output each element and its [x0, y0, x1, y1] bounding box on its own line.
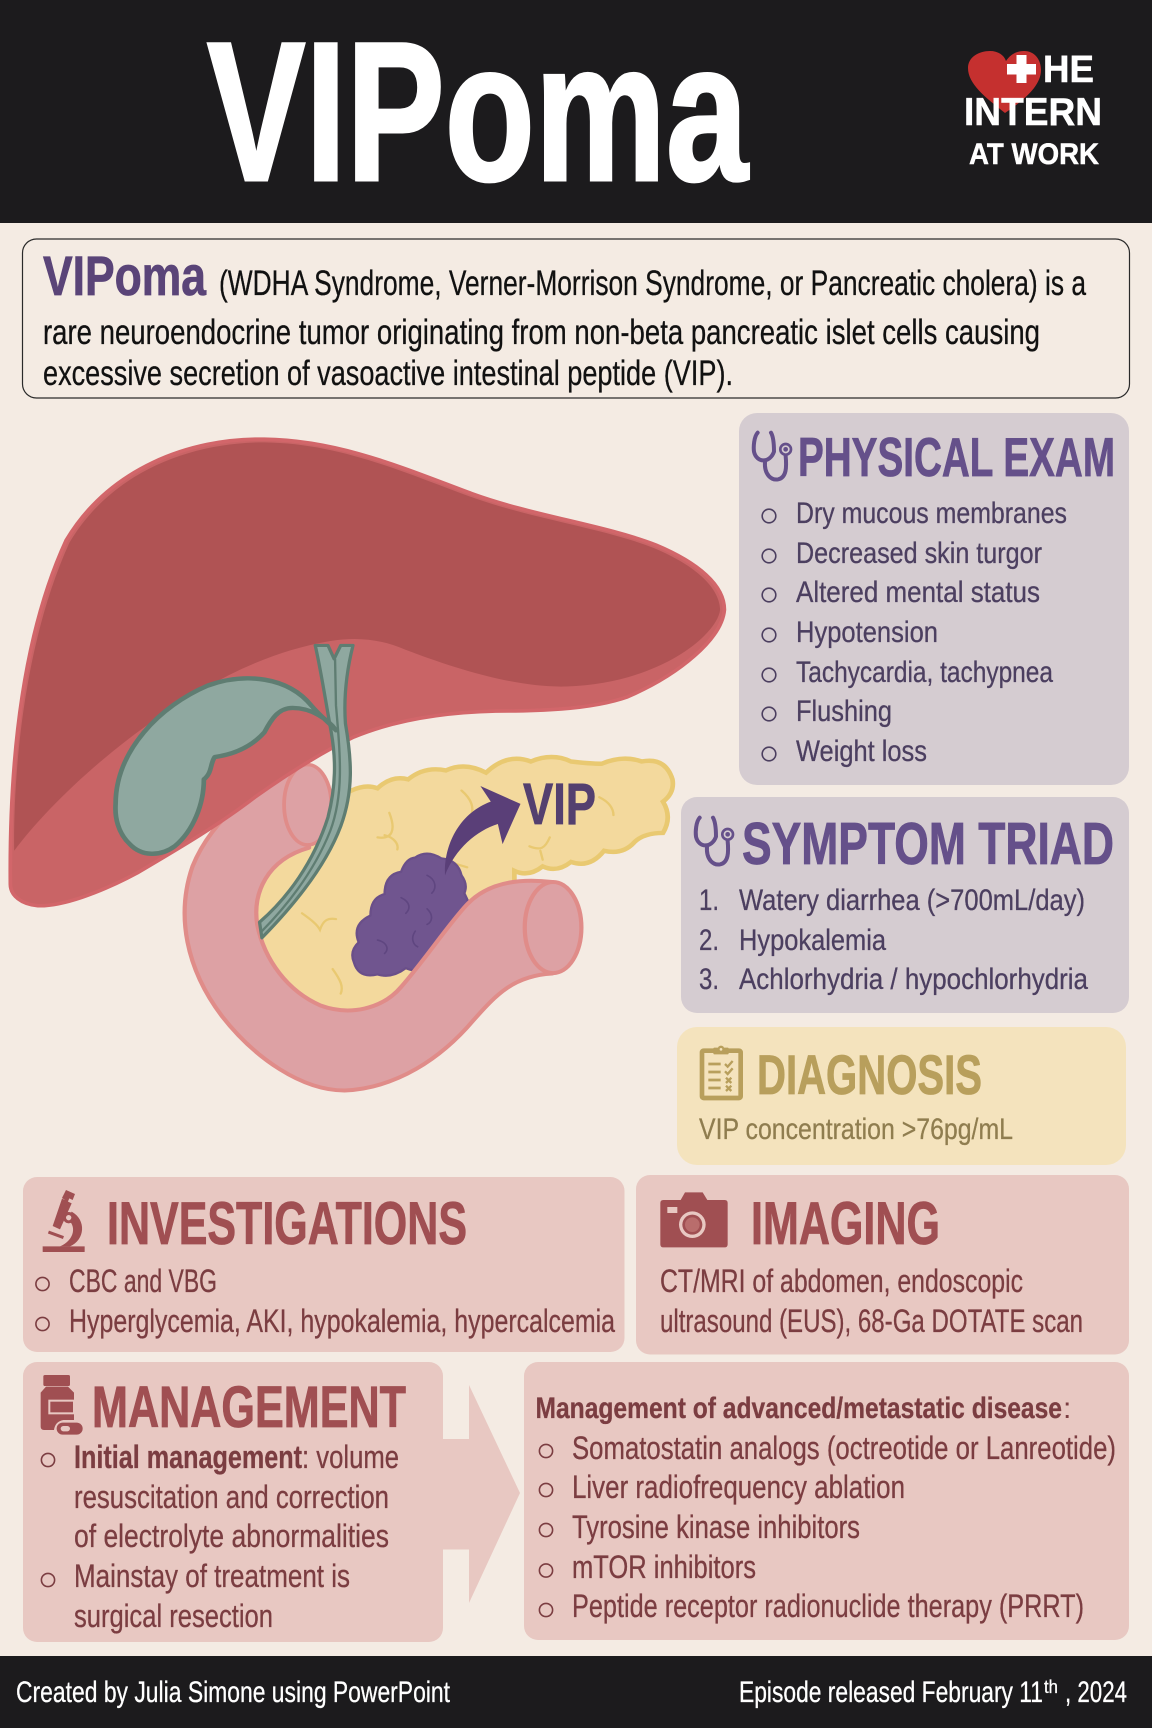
list: exam findings: Altered mental status	[796, 576, 1040, 609]
icon: microscope	[43, 1190, 85, 1252]
episode date: Episode released February 11	[739, 1676, 1043, 1709]
icon: camera	[660, 1192, 728, 1247]
list: lab tests: Hyperglycemia, AKI, hypokalemia, hypercalcemia	[69, 1303, 615, 1339]
heading: IMAGING	[751, 1190, 940, 1257]
panel: imaging	[636, 1175, 1129, 1354]
list: initial management: : volume	[302, 1439, 399, 1475]
list: advanced therapies: mTOR inhibitors	[572, 1549, 756, 1585]
list: triad symptoms: 1.	[699, 884, 719, 917]
icon: pill bottle	[41, 1375, 83, 1435]
heading: INVESTIGATIONS	[107, 1190, 467, 1257]
list: initial management: resuscitation and correction	[74, 1479, 389, 1515]
list: lab tests: CBC and VBG	[69, 1263, 217, 1299]
list: triad symptoms: Hypokalemia	[739, 924, 886, 957]
list: exam findings: Dry mucous membranes	[796, 497, 1067, 530]
pancreas	[227, 757, 673, 1036]
definition heading: VIPoma	[43, 244, 207, 307]
panel: investigations	[23, 1177, 624, 1352]
list: advanced therapies	[539, 1430, 1116, 1624]
icon: stethoscope	[696, 818, 733, 865]
list: exam findings: Decreased skin turgor	[796, 537, 1042, 570]
list: initial management: Initial management	[74, 1439, 302, 1475]
list: exam findings: Hypotension	[796, 616, 938, 649]
footer banner	[0, 1656, 1152, 1728]
list: initial management: surgical resection	[74, 1598, 273, 1634]
list: advanced therapies: Liver radiofrequency ablation	[572, 1469, 905, 1505]
logo: The Intern at Work: AT WORK	[969, 138, 1099, 171]
VIP label: VIP	[523, 772, 596, 837]
list: exam findings: Tachycardia, tachypnea	[796, 656, 1053, 689]
list: exam findings: Weight loss	[796, 735, 927, 768]
list: initial management: Mainstay of treatment is	[74, 1558, 350, 1594]
panel: physical exam	[739, 413, 1129, 785]
panel: symptom triad	[681, 797, 1129, 1013]
list: triad symptoms	[699, 884, 1088, 996]
logo: The Intern at Work: INTERN	[964, 91, 1102, 134]
heading: DIAGNOSIS	[757, 1043, 982, 1106]
bile duct	[260, 645, 353, 938]
list: initial management: of electrolyte abnormalities	[74, 1518, 389, 1554]
logo: The Intern at Work	[964, 49, 1102, 171]
list: advanced therapies: Tyrosine kinase inhibitors	[572, 1509, 860, 1545]
list: triad symptoms: Achlorhydria / hypochlorhydria	[739, 963, 1088, 996]
header banner	[0, 0, 1152, 223]
logo: The Intern at Work: HE	[1043, 49, 1094, 91]
icon: stethoscope	[754, 433, 791, 480]
duodenum	[185, 765, 581, 1090]
liver	[10, 439, 724, 906]
panel: advanced disease management	[524, 1362, 1129, 1640]
arrow: tumor secretes VIP	[445, 786, 521, 875]
panel: diagnosis	[677, 1027, 1126, 1165]
heading: MANAGEMENT	[92, 1375, 406, 1440]
diagnostic threshold: VIP concentration >76pg/mL	[699, 1113, 1013, 1146]
arrow: management to advanced disease	[443, 1385, 520, 1603]
credit: Created by Julia Simone using PowerPoint	[16, 1676, 451, 1709]
imaging modalities text	[660, 1263, 1083, 1339]
tumor	[352, 854, 470, 976]
list: exam findings	[762, 497, 1067, 768]
title: VIPoma	[207, 1, 749, 222]
list: initial management	[41, 1439, 399, 1634]
episode date: , 2024	[1065, 1676, 1127, 1709]
icon: clipboard	[702, 1046, 741, 1098]
gallbladder	[115, 678, 336, 854]
definition line 3: excessive secretion of vasoactive intestinal peptide (VIP).	[43, 354, 733, 393]
list: lab tests	[36, 1263, 615, 1339]
imaging modalities text: CT/MRI of abdomen, endoscopic	[660, 1263, 1023, 1299]
list: exam findings: Flushing	[796, 695, 892, 728]
list: triad symptoms: 3.	[699, 963, 719, 996]
panel: management	[23, 1362, 443, 1642]
list: triad symptoms: 2.	[699, 924, 719, 957]
heading colon: :	[1063, 1392, 1071, 1425]
episode date: th	[1044, 1677, 1058, 1697]
list: triad symptoms: Watery diarrhea (>700mL/day)	[739, 884, 1085, 917]
illustration: liver, gallbladder, pancreas, duodenum and tumor	[10, 439, 724, 1090]
panel: definition	[22, 239, 1130, 398]
